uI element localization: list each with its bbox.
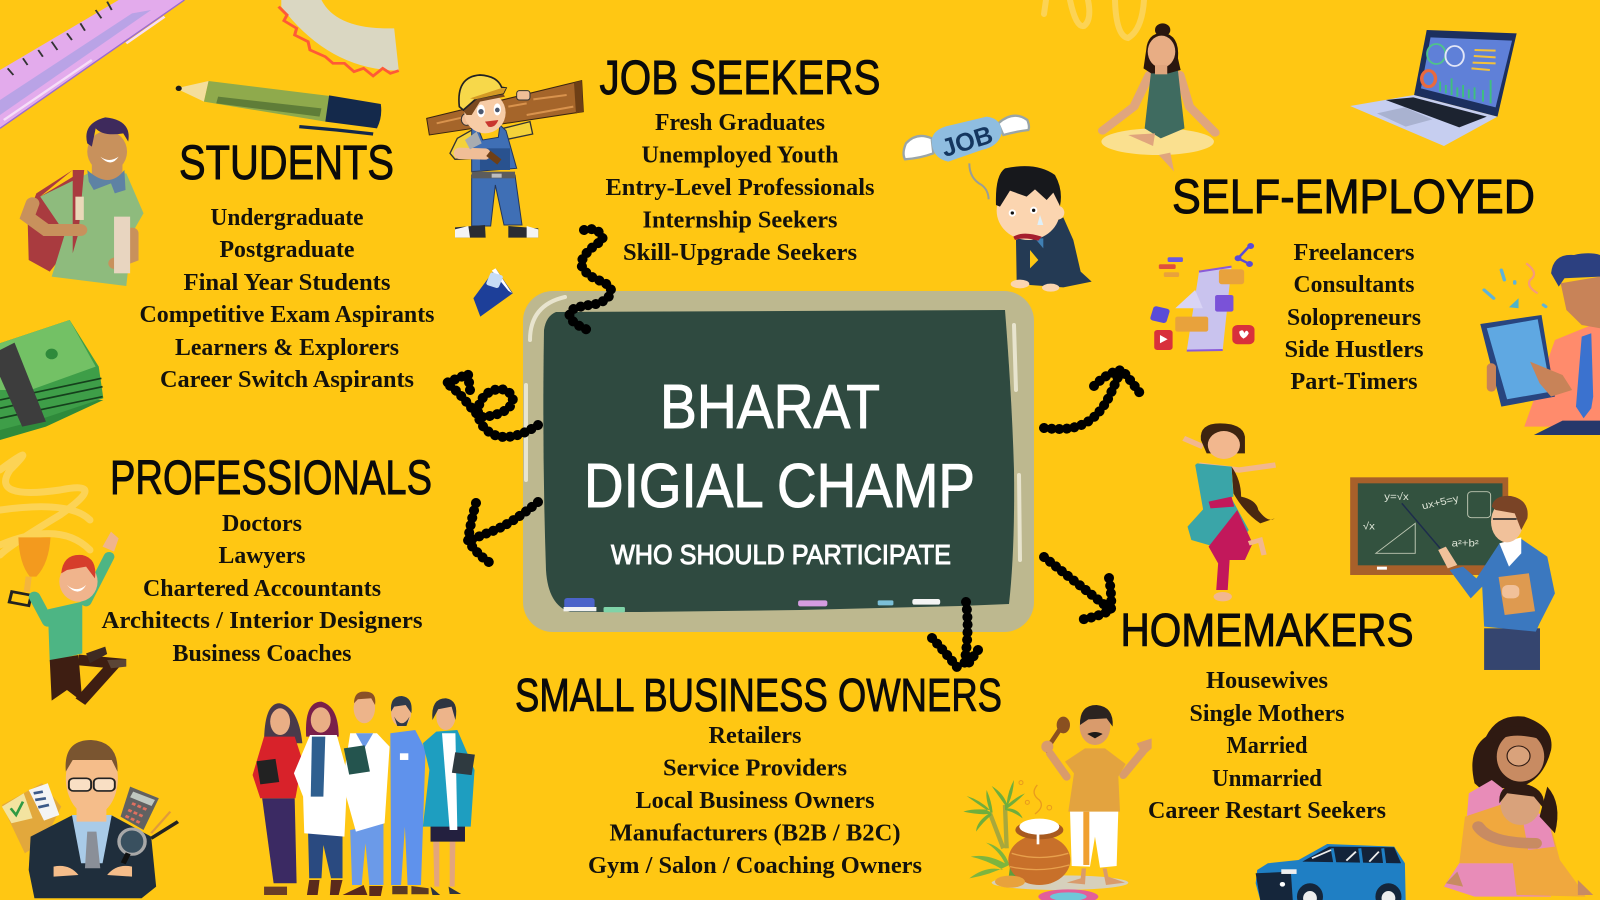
list: self-employed: Side Hustlers: [1284, 337, 1424, 363]
panel: professionals: [102, 452, 432, 667]
subtitle: WHO SHOULD PARTICIPATE: [611, 539, 951, 570]
list: professionals: Doctors: [222, 511, 302, 537]
chalkboard: [543, 310, 1014, 612]
figure: woman in teal coat: [423, 698, 475, 895]
list: students: Final Year Students: [184, 270, 390, 296]
panel: small business owners: [515, 669, 1002, 879]
figure: woman doctor: [294, 702, 347, 895]
list: job seekers: Internship Seekers: [642, 208, 838, 234]
heading: job seekers: JOB SEEKERS: [600, 52, 880, 105]
list: job seekers: Fresh Graduates: [655, 110, 825, 136]
heading: students: STUDENTS: [179, 137, 394, 190]
icon: laptop with dashboard: [1350, 30, 1517, 146]
panel: job seekers: [600, 52, 880, 266]
list: homemakers: Unmarried: [1212, 766, 1323, 792]
icon: teacher at chalkboard: [1350, 477, 1555, 670]
icon: man with tablet: [1480, 253, 1600, 435]
list: job seekers: Skill-Upgrade Seekers: [623, 240, 857, 266]
chalk writing: y=√x: [1384, 492, 1409, 503]
list: homemakers: Housewives: [1206, 668, 1328, 694]
icon: team of medical professionals: [253, 692, 475, 896]
heading: small business owners: SMALL BUSINESS OWNERS: [515, 669, 1002, 721]
title: bharat: BHARAT: [660, 373, 880, 442]
list: professionals: Chartered Accountants: [143, 576, 381, 602]
icon: blue smartphone: [473, 268, 513, 317]
list: small business owners: Gym / Salon / Coaching Owners: [588, 853, 922, 879]
chalk writing: ux+5=y: [1421, 493, 1461, 512]
icon: meditating woman: [1101, 23, 1215, 172]
list: students: [140, 205, 434, 393]
list: professionals: Architects / Interior Designers: [102, 608, 422, 634]
chalk writing: √x: [1363, 521, 1375, 532]
figure: male nurse: [390, 696, 429, 894]
heading: professionals: PROFESSIONALS: [110, 452, 432, 505]
panel: self-employed: [1172, 171, 1535, 395]
list: homemakers: Career Restart Seekers: [1148, 798, 1386, 824]
icon: mother hugging child: [1444, 716, 1593, 897]
icon: pencil shaving: [279, 0, 399, 76]
icon: man with pongal pot: [963, 705, 1152, 900]
chalk pieces: [564, 598, 940, 612]
arrow: to professionals: [468, 502, 538, 565]
chalk writing: [1363, 492, 1491, 570]
list: students: Postgraduate: [220, 237, 355, 263]
arrow: to students: [444, 374, 538, 437]
list: professionals: Lawyers: [218, 543, 306, 569]
list: self-employed: Consultants: [1294, 272, 1414, 298]
flying job badge: JOB: [938, 121, 996, 163]
icon: construction worker with plank: [427, 75, 583, 238]
list: self-employed: [1284, 240, 1424, 395]
icon: worried job seeker with job badge: [904, 116, 1092, 292]
icon: pencil: [176, 81, 381, 134]
figure: woman in red: [253, 703, 302, 895]
list: professionals: Business Coaches: [172, 641, 352, 667]
title: digial champ: DIGIAL CHAMP: [584, 452, 975, 521]
board frame: [523, 291, 1034, 632]
panel: students: [140, 137, 434, 393]
panel: homemakers: [1120, 604, 1414, 824]
icon: student with backpack: [28, 117, 144, 286]
icon: money bundle: [0, 320, 103, 440]
arrow: to job seekers: [569, 229, 611, 332]
list: students: Learners & Explorers: [175, 335, 399, 361]
arrow: to homemakers: [1044, 557, 1111, 620]
list: small business owners: Retailers: [708, 723, 802, 749]
list: job seekers: [606, 110, 874, 266]
list: small business owners: Service Providers: [663, 756, 847, 782]
arrow: to self-employed: [1044, 370, 1142, 429]
icon: dancer: [1184, 423, 1276, 601]
list: professionals: [102, 511, 422, 667]
list: students: Undergraduate: [210, 205, 364, 231]
list: job seekers: Unemployed Youth: [642, 142, 838, 168]
icon: blue car: [1256, 844, 1406, 900]
icon: jumping man with trophy: [9, 532, 126, 702]
panel: board: [523, 291, 1034, 632]
icon: accountant: [2, 740, 178, 898]
chalk writing: a²+b²: [1452, 538, 1479, 549]
heading: homemakers: HOMEMAKERS: [1120, 604, 1414, 656]
list: homemakers: Married: [1226, 733, 1308, 759]
list: small business owners: Manufacturers (B2B / B2C): [610, 820, 900, 846]
list: self-employed: Solopreneurs: [1287, 305, 1421, 331]
list: students: Competitive Exam Aspirants: [140, 302, 434, 328]
icon: ruler: [0, 0, 184, 128]
heading: self-employed: SELF-EMPLOYED: [1172, 171, 1535, 224]
arrow: to small business owners: [932, 602, 978, 667]
flying job badge: [904, 116, 1029, 163]
list: students: Career Switch Aspirants: [160, 367, 414, 393]
list: small business owners: Local Business Owners: [636, 788, 874, 814]
icon: social media phone: [1150, 243, 1254, 351]
figure: male doctor: [343, 692, 390, 896]
list: homemakers: Single Mothers: [1190, 701, 1344, 727]
list: small business owners: [588, 723, 922, 879]
list: job seekers: Entry-Level Professionals: [606, 175, 874, 201]
list: homemakers: [1148, 668, 1386, 824]
list: self-employed: Freelancers: [1294, 240, 1414, 266]
list: self-employed: Part-Timers: [1290, 369, 1418, 395]
